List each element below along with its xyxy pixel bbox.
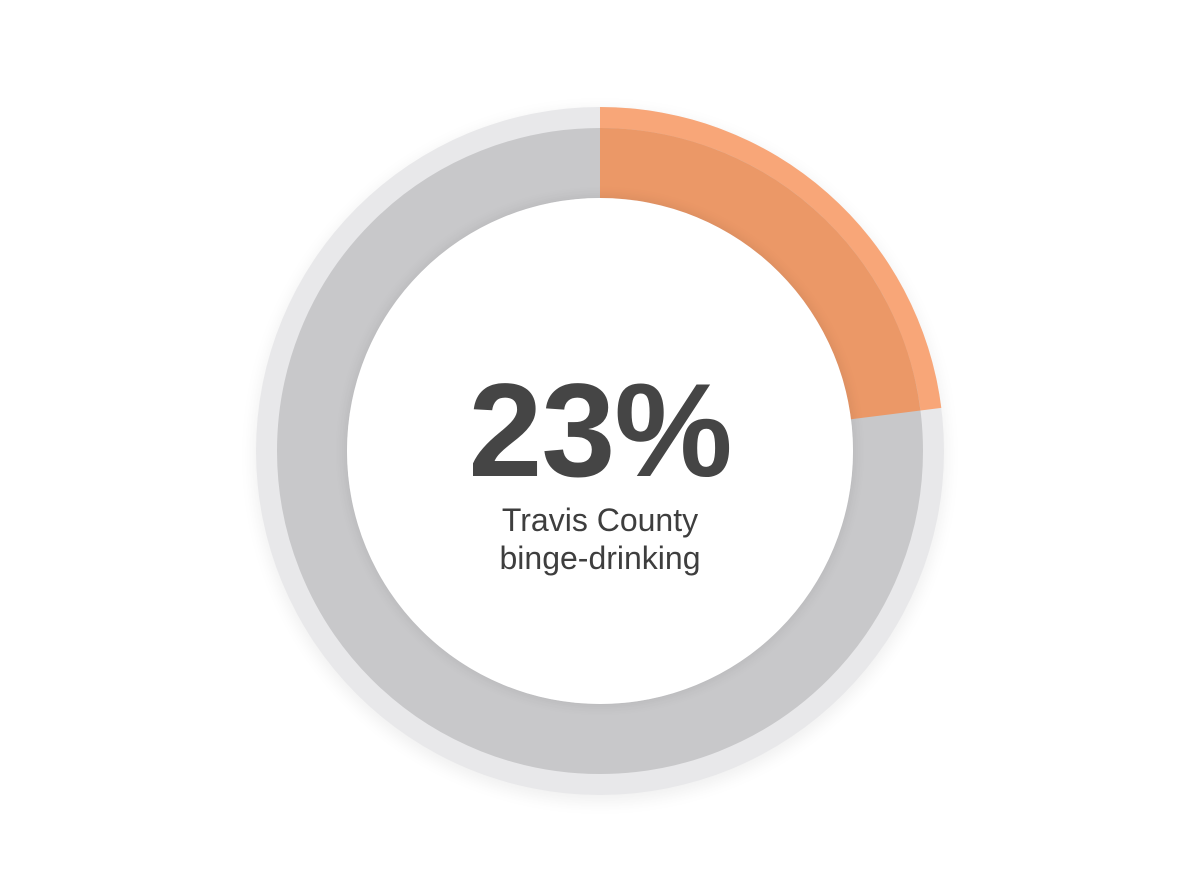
caption — [499, 502, 700, 576]
inner white disk — [347, 198, 853, 704]
gray ring — [312, 163, 888, 739]
outer light ring — [256, 107, 944, 795]
orange outer highlight segment — [600, 107, 941, 451]
inner disk shadow — [345, 196, 855, 706]
big percentage: 23% — [468, 357, 732, 505]
orange segment 23% — [600, 163, 886, 415]
outer shadow — [254, 110, 946, 802]
caption: Travis County — [502, 502, 698, 538]
center label — [468, 357, 732, 576]
caption: binge-drinking — [499, 540, 700, 576]
